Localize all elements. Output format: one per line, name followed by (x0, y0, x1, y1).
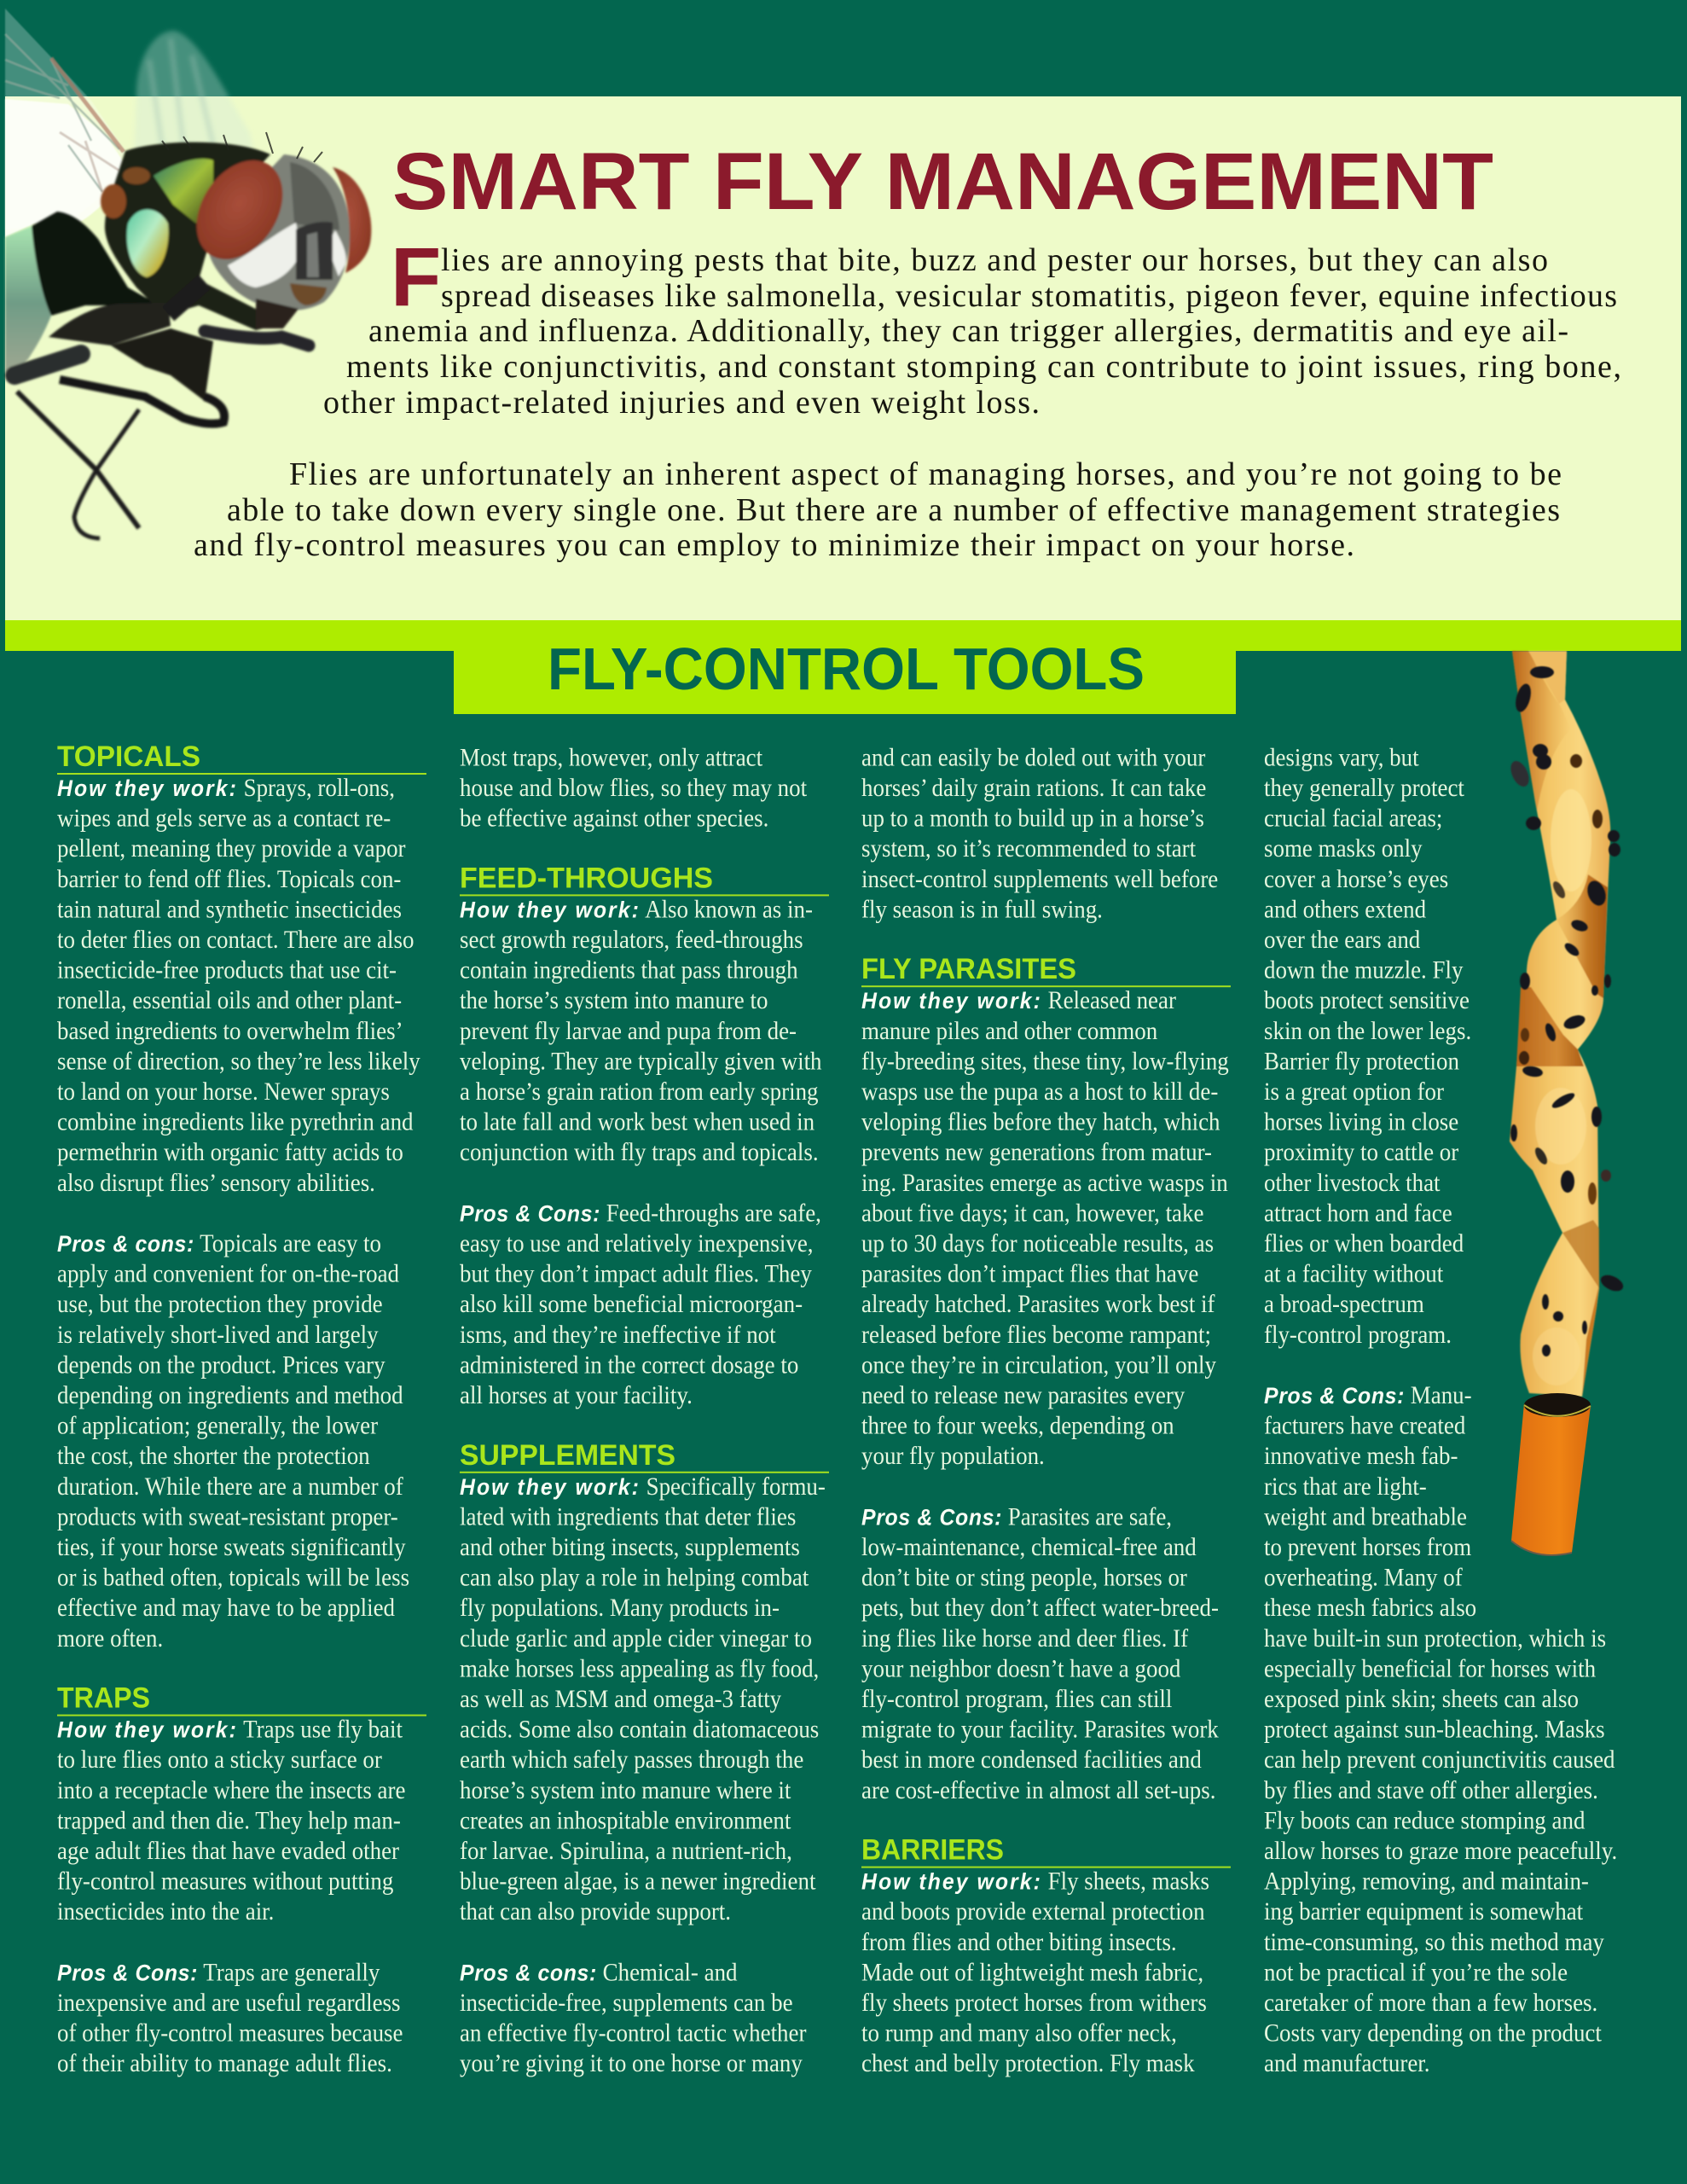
text block: barriers continued: cover a horse’s eyes (1264, 866, 1448, 893)
text block: introduction: able to take down every single one. But there are a number of effective management strategies (227, 492, 1560, 528)
section: traps: TRAPS (57, 1682, 150, 1715)
text block: barriers continued: is a great option for (1264, 1078, 1445, 1106)
section: feed-throughs: a horse’s grain ration from early spring (460, 1078, 819, 1106)
text block: introduction: Flies are unfortunately an inherent aspect of managing horses, and you’re not going to be (289, 456, 1562, 492)
icon: fly paper strip with trapped flies and tube (1507, 651, 1626, 1555)
text block: barriers continued: by flies and stave off other allergies. (1264, 1777, 1598, 1804)
section: topicals: depending on ingredients and method (57, 1382, 403, 1409)
section: fly parasites: veloping flies before they hatch, which (861, 1109, 1220, 1136)
text block: introduction (194, 242, 1621, 563)
section: traps: inexpensive and are useful regardless (57, 1989, 401, 2017)
text block: barriers continued: these mesh fabrics also (1264, 1594, 1476, 1622)
text block: introduction: lies are annoying pests that bite, buzz and pester our horses, but they can also (441, 242, 1548, 278)
section: feed-throughs: all horses at your facility. (460, 1382, 693, 1409)
section: supplements: as well as MSM and omega-3 fatty (460, 1686, 781, 1713)
text block: barriers continued: over the ears and (1264, 926, 1420, 954)
section: supplements (460, 1439, 829, 2077)
text block: supplements continued: system, so it’s recommended to start (861, 835, 1196, 863)
text block: barriers continued: rics that are light- (1264, 1473, 1427, 1501)
section: feed-throughs: but they don’t impact adult flies. They (460, 1261, 812, 1288)
section: barriers: How they work: Fly sheets, masks (861, 1868, 1209, 1896)
title: SMART FLY MANAGEMENT (392, 136, 1493, 227)
section: topicals: combine ingredients like pyrethrin and (57, 1109, 414, 1136)
text block: barriers continued: a broad-spectrum (1264, 1291, 1424, 1318)
section: fly parasites: your neighbor doesn’t have a good (861, 1655, 1180, 1683)
section: topicals: also disrupt flies’ sensory abilities. (57, 1170, 375, 1197)
section: topicals: products with sweat-resistant proper- (57, 1503, 398, 1531)
section: barriers: BARRIERS (861, 1834, 1004, 1867)
text block: barriers continued: crucial facial areas; (1264, 805, 1442, 833)
text block: barriers continued: innovative mesh fab- (1264, 1443, 1458, 1470)
section: feed-throughs: the horse’s system into manure to (460, 987, 768, 1014)
section: topicals: ties, if your horse sweats significantly (57, 1534, 406, 1561)
section: supplements: Pros & cons: Chemical- and (460, 1959, 738, 1987)
section: supplements: blue-green algae, is a newer ingredient (460, 1868, 816, 1896)
heading: fly-control tools: FLY-CONTROL TOOLS (548, 636, 1145, 702)
section: fly parasites: fly-control program, flies can still (861, 1686, 1173, 1713)
text block: barriers continued: fly-control program. (1264, 1321, 1452, 1349)
section: fly parasites: ing flies like horse and deer flies. If (861, 1625, 1189, 1653)
section: feed-throughs: isms, and they’re ineffective if not (460, 1321, 776, 1349)
section: topicals: is relatively short-lived and largely (57, 1321, 379, 1349)
text block: barriers continued: skin on the lower legs. (1264, 1018, 1471, 1045)
section: fly parasites: migrate to your facility. Parasites work (861, 1716, 1220, 1744)
section: fly parasites: low-maintenance, chemical-free and (861, 1534, 1197, 1561)
section: traps: of their ability to manage adult flies. (57, 2050, 392, 2077)
section: traps: fly-control measures without putting (57, 1868, 393, 1896)
section: topicals: insecticide-free products that use cit- (57, 957, 397, 985)
section: fly parasites: fly-breeding sites, these tiny, low-flying (861, 1048, 1229, 1076)
text block: barriers continued: can help prevent conjunctivitis caused (1264, 1746, 1615, 1774)
text block: barriers continued: facturers have created (1264, 1413, 1465, 1440)
section: feed-throughs: sect growth regulators, feed-throughs (460, 926, 803, 954)
section: traps: of other fly-control measures because (57, 2020, 403, 2048)
section: supplements: can also play a role in helping combat (460, 1565, 809, 1592)
section: supplements: earth which safely passes through the (460, 1746, 803, 1774)
section: feed-throughs: easy to use and relatively inexpensive, (460, 1230, 814, 1258)
text block: barriers continued: attract horn and face (1264, 1199, 1452, 1228)
section: topicals: TOPICALS (57, 741, 200, 773)
section: fly parasites: manure piles and other common (861, 1018, 1157, 1045)
icon: fly photo illustration (5, 9, 371, 538)
section: fly parasites: don’t bite or sting people, horses or (861, 1565, 1188, 1592)
section: supplements: horse’s system into manure where it (460, 1777, 791, 1804)
section: fly parasites (861, 953, 1231, 1804)
text block: barriers continued: horses living in close (1264, 1109, 1458, 1136)
text block: barriers continued: and manufacturer. (1264, 2050, 1430, 2077)
section: feed-throughs: How they work: Also known as in- (460, 896, 813, 924)
text block: supplements continued: up to a month to build up in a horse’s (861, 805, 1204, 833)
section: topicals: apply and convenient for on-the-road (57, 1261, 399, 1288)
section: topicals: How they work: Sprays, roll-ons, (57, 775, 395, 802)
text block: supplements continued: horses’ daily grain rations. It can take (861, 775, 1206, 802)
section: fly parasites: about five days; it can, however, take (861, 1199, 1203, 1228)
text block: barriers continued: overheating. Many of (1264, 1565, 1463, 1592)
text block: barriers continued: proximity to cattle or (1264, 1139, 1459, 1166)
section: feed-throughs: to late fall and work best when used in (460, 1109, 815, 1136)
text block: barriers continued: down the muzzle. Fly (1264, 957, 1463, 985)
band: lime divider (5, 620, 1681, 651)
section: topicals: ronella, essential oils and other plant- (57, 987, 402, 1014)
section: topicals: depends on the product. Prices vary (57, 1351, 386, 1380)
section: supplements: SUPPLEMENTS (460, 1439, 675, 1472)
text block: barriers continued: allow horses to graze more peacefully. (1264, 1838, 1617, 1865)
section: supplements: lated with ingredients that deter flies (460, 1503, 796, 1531)
drop cap: F (391, 230, 441, 323)
section: traps: into a receptacle where the insects are (57, 1777, 405, 1804)
section: fly parasites: prevents new generations from matur- (861, 1139, 1212, 1166)
section: traps: to lure flies onto a sticky surface or (57, 1746, 382, 1774)
section: traps (57, 1682, 426, 2077)
section: topicals: sense of direction, so they’re less likely (57, 1048, 420, 1076)
text block: introduction: other impact-related injuries and even weight loss. (323, 385, 1040, 421)
section: feed-throughs: conjunction with fly traps and topicals. (460, 1139, 819, 1166)
text block: barriers continued: caretaker of more than a few horses. (1264, 1989, 1597, 2017)
section: topicals: Pros & cons: Topicals are easy to (57, 1230, 381, 1258)
section: traps: trapped and then die. They help man- (57, 1807, 401, 1835)
section: topicals: or is bathed often, topicals will be less (57, 1565, 409, 1592)
section: topicals: use, but the protection they provide (57, 1291, 383, 1318)
section: feed-throughs: FEED-THROUGHS (460, 862, 713, 894)
section: topicals: wipes and gels serve as a contact re- (57, 805, 391, 833)
text block: barriers continued: designs vary, but (1264, 744, 1419, 772)
section: feed-throughs: veloping. They are typically given with (460, 1048, 822, 1076)
section: topicals: barrier to fend off flies. Topicals con- (57, 866, 401, 893)
section: supplements: you’re giving it to one horse or many (460, 2050, 803, 2077)
section: fly parasites: parasites don’t impact flies that have (861, 1261, 1198, 1288)
text block: barriers continued (1264, 744, 1617, 2077)
section: fly parasites: your fly population. (861, 1443, 1045, 1470)
section: topicals: pellent, meaning they provide a vapor (57, 835, 406, 863)
text block: barriers continued: some masks only (1264, 835, 1423, 863)
text block: barriers continued: have built-in sun protection, which is (1264, 1625, 1606, 1653)
section: feed-throughs: administered in the correct dosage to (460, 1351, 798, 1380)
text block: barriers continued: exposed pink skin; sheets can also (1264, 1686, 1579, 1713)
section: topicals: of application; generally, the lower (57, 1413, 379, 1440)
text block: supplements continued (861, 744, 1218, 924)
text block: barriers continued: boots protect sensitive (1264, 987, 1470, 1014)
section: fly parasites: already hatched. Parasites work best if (861, 1291, 1215, 1318)
section: traps: insecticides into the air. (57, 1898, 274, 1926)
text block: introduction: spread diseases like salmonella, vesicular stomatitis, pigeon fever, equine infectious (441, 278, 1617, 314)
text block: barriers continued: and others extend (1264, 896, 1426, 924)
section: fly parasites: How they work: Released near (861, 987, 1177, 1014)
section: barriers: chest and belly protection. Fly mask (861, 2050, 1196, 2077)
section: topicals: duration. While there are a number of (57, 1473, 403, 1501)
text block: supplements continued: fly season is in full swing. (861, 896, 1103, 924)
text block: barriers continued: Barrier fly protection (1264, 1048, 1459, 1076)
text block: barriers continued: Fly boots can reduce stomping and (1264, 1807, 1585, 1835)
section: fly parasites: FLY PARASITES (861, 953, 1076, 985)
section: fly parasites: Pros & Cons: Parasites are safe, (861, 1503, 1172, 1531)
text block: introduction: anemia and influenza. Additionally, they can trigger allergies, dermatitis and eye ail- (368, 313, 1568, 349)
section: traps: Pros & Cons: Traps are generally (57, 1959, 380, 1987)
text block: barriers continued: time-consuming, so this method may (1264, 1929, 1604, 1956)
section: fly parasites: ing. Parasites emerge as active wasps in (861, 1170, 1228, 1197)
section: topicals: effective and may have to be applied (57, 1594, 395, 1622)
section: supplements: creates an inhospitable environment (460, 1807, 791, 1835)
section: barriers: fly sheets protect horses from withers (861, 1989, 1207, 2017)
section: supplements: How they work: Specifically formu- (460, 1473, 826, 1501)
section: barriers (861, 1834, 1231, 2077)
section: fly parasites: once they’re in circulation, you’ll only (861, 1351, 1216, 1380)
text block: barriers continued: they generally protect (1264, 775, 1464, 802)
section: supplements: make horses less appealing as fly food, (460, 1655, 819, 1683)
section: topicals: to deter flies on contact. There are also (57, 926, 414, 954)
section: barriers: to rump and many also offer neck, (861, 2020, 1177, 2048)
section: fly parasites: pets, but they don’t affect water-breed- (861, 1594, 1219, 1622)
panel: introduction (5, 96, 1681, 620)
section: topicals: based ingredients to overwhelm flies’ (57, 1018, 403, 1045)
section: supplements: fly populations. Many products in- (460, 1594, 780, 1622)
section: topicals: permethrin with organic fatty acids to (57, 1139, 403, 1166)
section: fly parasites: three to four weeks, depending on (861, 1413, 1174, 1440)
section: feed-throughs: also kill some beneficial microorgan- (460, 1291, 803, 1318)
section: barriers: Made out of lightweight mesh fabric, (861, 1959, 1203, 1987)
section: topicals (57, 741, 426, 1653)
text block: barriers continued: flies or when boarded (1264, 1230, 1464, 1258)
section: fly parasites: need to release new parasites every (861, 1382, 1185, 1409)
text block: traps continued: be effective against other species. (460, 805, 768, 833)
section: topicals: more often. (57, 1625, 163, 1653)
section: traps: How they work: Traps use fly bait (57, 1716, 403, 1744)
section: barriers: and boots provide external protection (861, 1898, 1205, 1926)
section: feed-throughs: contain ingredients that pass through (460, 957, 798, 985)
section: supplements: an effective fly-control tactic whether (460, 2020, 807, 2048)
text block: introduction: and fly-control measures you can employ to minimize their impact on your horse. (194, 527, 1354, 563)
text block: traps continued (460, 744, 807, 833)
heading: fly-control tools (454, 636, 1236, 714)
text block: barriers continued: to prevent horses from (1264, 1534, 1471, 1561)
text block: traps continued: Most traps, however, only attract (460, 744, 762, 772)
text block: barriers continued: weight and breathable (1264, 1503, 1467, 1531)
text block: barriers continued: Applying, removing, and maintain- (1264, 1868, 1589, 1896)
section: fly parasites: up to 30 days for noticeable results, as (861, 1230, 1214, 1258)
section: fly parasites: best in more condensed facilities and (861, 1746, 1202, 1774)
section: barriers: from flies and other biting insects. (861, 1929, 1177, 1956)
section: feed-throughs: prevent fly larvae and pupa from de- (460, 1018, 797, 1045)
section: topicals: to land on your horse. Newer sprays (57, 1078, 390, 1106)
section: topicals: the cost, the shorter the protection (57, 1443, 370, 1470)
text block: supplements continued: insect-control supplements well before (861, 866, 1218, 893)
text block: barriers continued: Costs vary depending on the product (1264, 2020, 1602, 2048)
text block: traps continued: house and blow flies, so they may not (460, 775, 807, 802)
text block: barriers continued: protect against sun-bleaching. Masks (1264, 1716, 1605, 1744)
text block: barriers continued: Pros & Cons: Manu- (1264, 1382, 1472, 1409)
text block: barriers continued: ing barrier equipment is somewhat (1264, 1898, 1583, 1926)
section: fly parasites: released before flies become rampant; (861, 1321, 1211, 1349)
text block: introduction: ments like conjunctivitis, and constant stomping can contribute to joint issues, ring bone, (346, 349, 1621, 385)
section: supplements: insecticide-free, supplements can be (460, 1989, 793, 2017)
section: fly parasites: are cost-effective in almost all set-ups. (861, 1777, 1216, 1804)
section: feed-throughs (460, 862, 829, 1409)
text block: barriers continued: not be practical if you’re the sole (1264, 1959, 1568, 1987)
section: fly parasites: wasps use the pupa as a host to kill de- (861, 1078, 1218, 1106)
section: supplements: for larvae. Spirulina, a nutrient-rich, (460, 1838, 792, 1865)
section: supplements: and other biting insects, supplements (460, 1534, 800, 1561)
section: feed-throughs: Pros & Cons: Feed-throughs are safe, (460, 1199, 821, 1228)
section: supplements: acids. Some also contain diatomaceous (460, 1716, 819, 1744)
section: traps: age adult flies that have evaded other (57, 1838, 400, 1865)
text block: supplements continued: and can easily be doled out with your (861, 744, 1206, 772)
section: topicals: tain natural and synthetic insecticides (57, 896, 402, 924)
text block: barriers continued: especially beneficial for horses with (1264, 1655, 1596, 1683)
text block: barriers continued: other livestock that (1264, 1170, 1441, 1197)
section: supplements: that can also provide support. (460, 1898, 731, 1926)
section: supplements: clude garlic and apple cider vinegar to (460, 1625, 812, 1653)
text block: barriers continued: at a facility without (1264, 1261, 1443, 1288)
